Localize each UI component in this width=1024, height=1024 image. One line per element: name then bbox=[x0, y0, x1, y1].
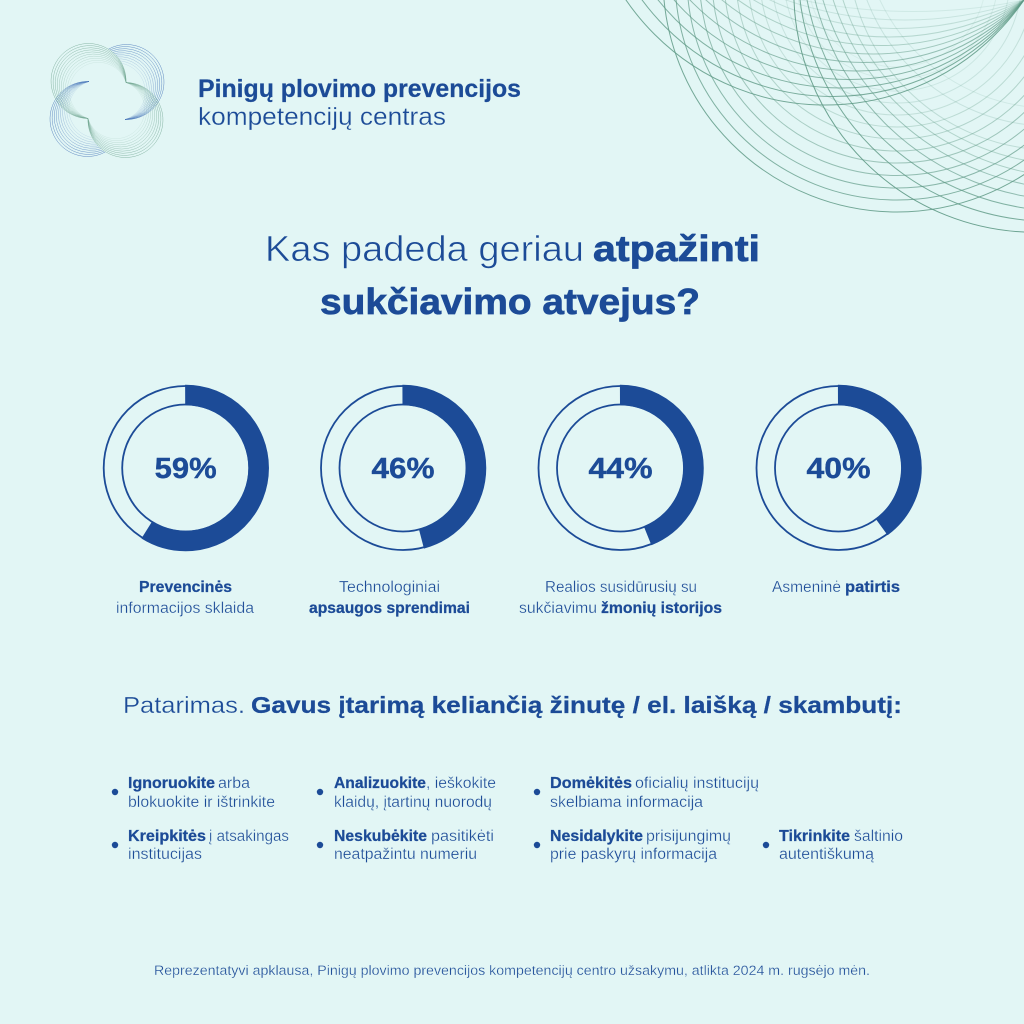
logo lobe: top right blue bbox=[108, 44, 164, 120]
label bbox=[519, 579, 722, 617]
tip: ignore: blokuokite ir ištrinkite bbox=[128, 794, 275, 811]
logo lobe: bottom right green bbox=[88, 82, 163, 157]
tip: contact institutions: institucijas bbox=[128, 846, 202, 863]
tip: do not share bbox=[534, 828, 731, 863]
advice heading: Gavus įtarimą keliančią žinutę / el. laišką / skambutį: bbox=[251, 692, 902, 718]
tip: contact institutions: Kreipkitės bbox=[128, 828, 206, 845]
tip: do not rush: Neskubėkite bbox=[334, 828, 427, 845]
tip: official information bbox=[534, 775, 759, 811]
tip: verify source: autentiškumą bbox=[779, 846, 874, 863]
tip: verify source: Tikrinkite bbox=[779, 828, 850, 845]
label: apsaugos sprendimai bbox=[309, 600, 470, 617]
advice heading: Patarimas. bbox=[123, 692, 245, 718]
title bbox=[265, 228, 760, 322]
value: 46% bbox=[372, 453, 435, 485]
tip: do not rush: neatpažintu numeriu bbox=[334, 846, 477, 863]
icon: organisation logo bbox=[50, 44, 164, 157]
label: informacijos sklaida bbox=[116, 600, 254, 617]
panel: statistic 40% bbox=[756, 386, 920, 596]
label: Asmeninė bbox=[772, 579, 841, 596]
label bbox=[309, 579, 470, 617]
tip: analyse: , ieškokite bbox=[426, 775, 496, 792]
tip: do not share: prie paskyrų informacija bbox=[550, 846, 717, 863]
label: žmonių istorijos bbox=[601, 600, 722, 617]
organisation name bbox=[198, 75, 521, 131]
tip: official information: Domėkitės bbox=[550, 775, 632, 792]
advice list bbox=[112, 775, 903, 863]
tip: ignore bbox=[112, 775, 275, 811]
tip: do not share: Nesidalykite bbox=[550, 828, 643, 845]
decorative line pattern: top right bbox=[372, 0, 1024, 232]
donut chart: 46% bbox=[321, 386, 485, 550]
organisation name: Pinigų plovimo prevencijos bbox=[198, 75, 521, 103]
logo lobe: bottom left blue bbox=[50, 81, 106, 157]
tip: verify source: šaltinio bbox=[854, 828, 903, 845]
tip: ignore: Ignoruokite bbox=[128, 775, 215, 792]
logo lobe: top left green bbox=[51, 44, 126, 118]
donut chart: 40% bbox=[756, 386, 920, 550]
tip: official information: skelbiama informacija bbox=[550, 794, 703, 811]
label: sukčiavimu bbox=[519, 600, 597, 617]
organisation name: kompetencijų centras bbox=[198, 103, 446, 131]
label: Technologiniai bbox=[339, 579, 440, 596]
label: patirtis bbox=[845, 579, 900, 596]
label: Prevencinės bbox=[139, 579, 232, 596]
tip: official information: oficialių institucijų bbox=[635, 775, 759, 792]
tip: contact institutions bbox=[112, 828, 289, 863]
tip: analyse bbox=[317, 775, 496, 811]
donut chart: 59% bbox=[104, 386, 268, 550]
tip: do not rush: pasitikėti bbox=[431, 828, 494, 845]
tip: analyse: Analizuokite bbox=[334, 775, 426, 792]
panel: statistic 46% bbox=[309, 386, 485, 617]
tip: contact institutions: į atsakingas bbox=[209, 828, 289, 845]
tip: analyse: klaidų, įtartinų nuorodų bbox=[334, 794, 492, 811]
title: atpažinti bbox=[593, 228, 760, 269]
tip: do not rush bbox=[317, 828, 494, 863]
value: 44% bbox=[588, 453, 653, 485]
footnote: Reprezentatyvi apklausa, Pinigų plovimo prevencijos kompetencijų centro užsakymu, atlikta 2024 m. rugsėjo mėn. bbox=[154, 963, 870, 978]
label bbox=[116, 579, 254, 617]
label: Realios susidūrusių su bbox=[545, 579, 697, 596]
panel: statistic 59% bbox=[104, 386, 268, 617]
tip: do not share: prisijungimų bbox=[646, 828, 731, 845]
title: sukčiavimo atvejus? bbox=[320, 281, 700, 322]
panel: statistic 44% bbox=[519, 386, 722, 617]
tip: ignore: arba bbox=[218, 775, 250, 792]
title: Kas padeda geriau bbox=[265, 228, 584, 269]
donut chart: 44% bbox=[538, 386, 702, 550]
label bbox=[772, 579, 900, 596]
tip: verify source bbox=[763, 828, 903, 863]
value: 59% bbox=[155, 453, 217, 485]
value: 40% bbox=[806, 453, 871, 485]
